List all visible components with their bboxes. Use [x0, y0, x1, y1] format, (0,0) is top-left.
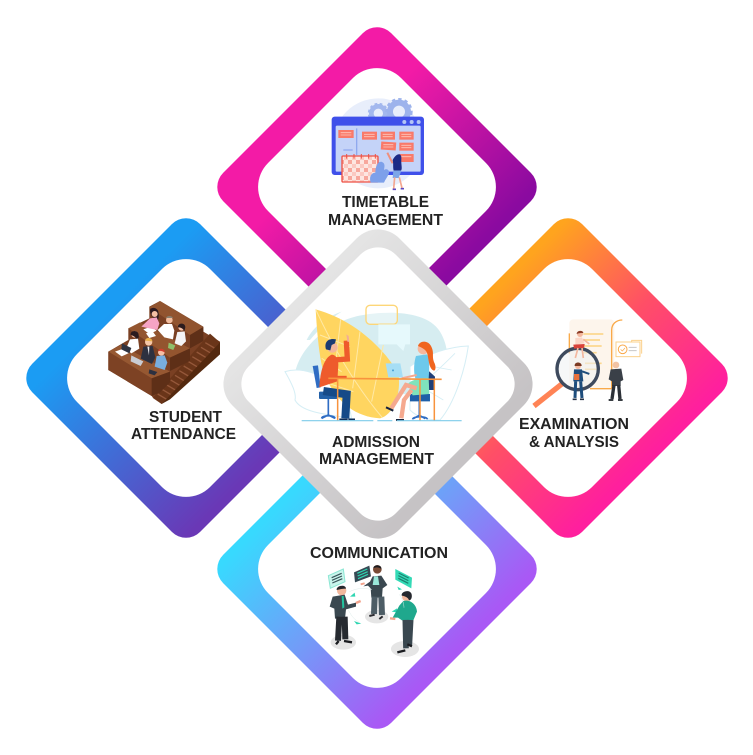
panel: student attendance diamond	[26, 218, 346, 538]
icon: student lecture hall seating	[108, 301, 220, 404]
heading: examination and analysis: & ANALYSIS	[529, 434, 619, 451]
panel: admission management centre diamond	[223, 229, 533, 539]
heading: student attendance: STUDENT	[149, 409, 223, 426]
heading: examination and analysis	[519, 416, 629, 451]
icon: examination magnifier, document and people	[534, 319, 642, 406]
heading: student attendance	[131, 409, 236, 443]
panel: examination and analysis diamond	[408, 218, 728, 538]
heading: timetable management	[328, 194, 444, 229]
icon: three colleagues talking	[328, 565, 419, 657]
heading: timetable management: MANAGEMENT	[328, 212, 444, 229]
heading: admission management: ADMISSION	[332, 434, 420, 451]
heading: student attendance: ATTENDANCE	[131, 426, 236, 443]
panel: timetable management diamond	[217, 27, 537, 347]
heading: admission management	[319, 434, 435, 468]
heading: timetable management: TIMETABLE	[342, 194, 429, 211]
heading: admission management: MANAGEMENT	[319, 451, 435, 468]
icon: admission meeting at a desk	[285, 305, 468, 421]
icon: timetable board with calendar and woman	[332, 98, 424, 189]
panel: communication diamond	[217, 409, 537, 729]
heading: examination and analysis: EXAMINATION	[519, 416, 629, 433]
heading: communication: COMMUNICATION	[310, 545, 448, 562]
